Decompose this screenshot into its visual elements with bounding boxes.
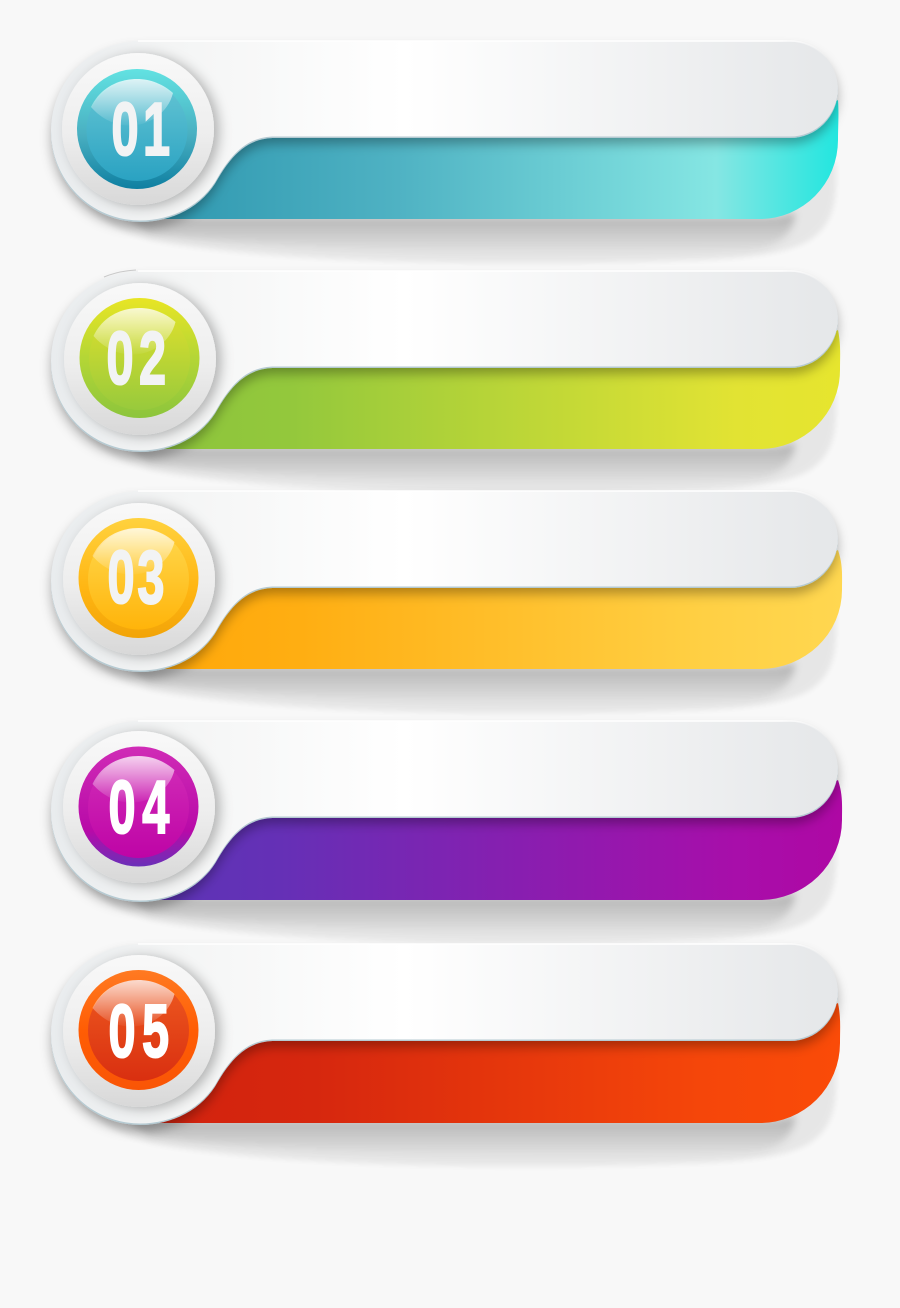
drop shadow 05 — [60, 1063, 836, 1166]
white panel 03 — [51, 491, 838, 672]
number button 05 — [78, 970, 198, 1090]
banner 03 — [51, 491, 842, 713]
number button 02 — [80, 298, 200, 418]
drop shadow 03 — [60, 610, 836, 713]
number 03: 03 — [108, 537, 165, 620]
banner 04 — [51, 721, 842, 943]
white panel 02 — [51, 270, 838, 452]
white panel 01 — [51, 41, 838, 222]
number 01: 01 — [112, 89, 170, 172]
white panel 05 — [51, 944, 838, 1125]
colour band 03 — [165, 550, 842, 669]
number button 03 — [78, 518, 198, 638]
drop shadow 04 — [60, 840, 836, 943]
colour band 05 — [140, 1003, 840, 1123]
colour band 02 — [150, 330, 840, 449]
number button 04 — [78, 746, 198, 866]
drop shadow 01 — [60, 160, 836, 263]
colour band 04 — [140, 780, 842, 900]
colour band 01 — [160, 100, 838, 219]
banner 01 — [51, 41, 838, 263]
number 02: 02 — [106, 318, 166, 401]
banner 02 — [51, 270, 840, 493]
drop shadow 02 — [60, 390, 836, 493]
number 04: 04 — [108, 767, 169, 850]
white panel 04 — [51, 721, 838, 902]
number button 01 — [77, 69, 197, 189]
number 05: 05 — [108, 991, 169, 1074]
banner 05 — [51, 944, 840, 1166]
